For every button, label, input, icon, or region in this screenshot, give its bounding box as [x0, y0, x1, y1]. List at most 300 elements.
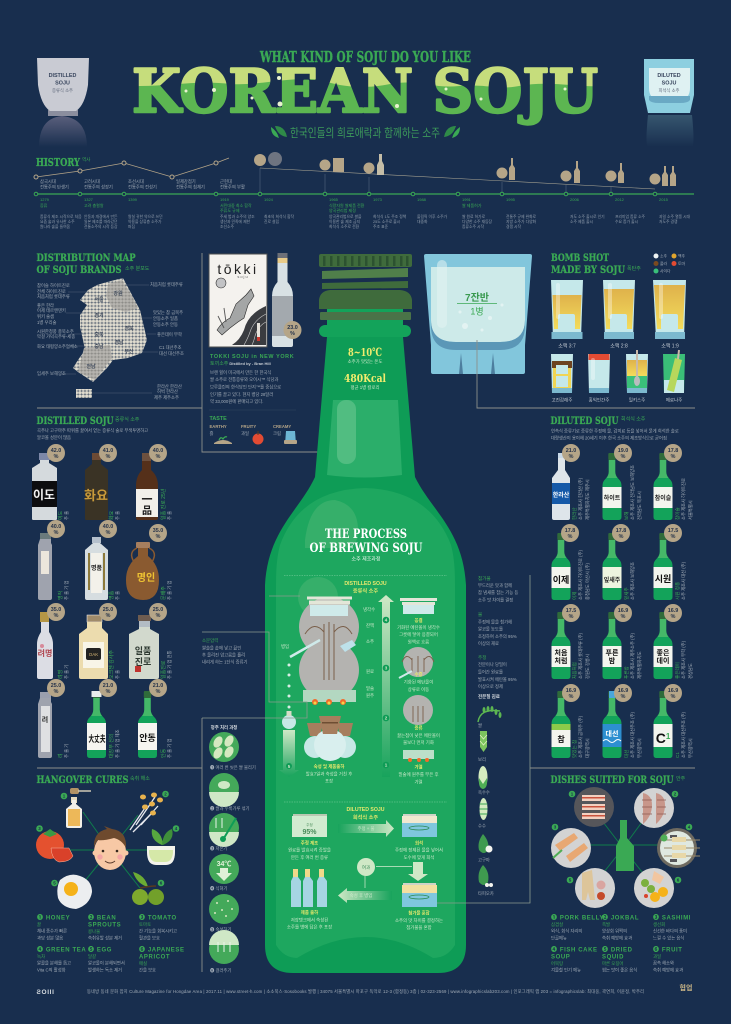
text: brand labels: 안동소주 안동	[153, 321, 178, 328]
icon: fried egg	[57, 875, 92, 909]
bottle: 대장부: %	[106, 689, 111, 695]
bottle: 매실: 추 출 기	[63, 665, 70, 679]
bottle: 오크젠: 25.0	[103, 607, 113, 613]
text: dishes list: 단골메뉴	[551, 934, 567, 942]
tank: spirit	[288, 814, 331, 861]
bottle: 시원: 17.5	[668, 528, 678, 534]
heading: process of brewing soju	[284, 527, 447, 576]
text: timeline entries: 2015	[659, 197, 669, 202]
bottle: 참이슬: 참이슬	[674, 507, 681, 520]
bottle: 처음처럼: 소주 제조사 롯데주류 (주)	[577, 632, 584, 679]
text: dishes list: 씹는 맛이 좋은 음식	[602, 966, 637, 974]
text: dishes list: ❷ JOKBAL	[602, 914, 639, 922]
text: dishes list: ❹ FISH CAKE	[551, 946, 598, 954]
text: timeline entries: 증류	[40, 202, 48, 208]
arrow: up steps: 2	[385, 716, 388, 721]
bottle: 참이슬: 소주 제조사 하이트진로	[680, 478, 687, 520]
number markers: 5	[53, 881, 56, 886]
text: dishes list: ❶ PORK BELLY	[551, 914, 604, 922]
text: hangover cure list: APRICOT	[139, 954, 170, 960]
tokki label card: soju	[237, 274, 249, 279]
tokki bottle	[272, 253, 293, 347]
step 4: cool: ❹ 식혀기	[210, 885, 227, 892]
text: dishes list: SQUID	[602, 954, 624, 960]
map: South Korea dot map: 부산	[124, 348, 134, 355]
bottle: 시원: 시원 청풍	[674, 582, 680, 600]
bottle: 미담: 25.0	[153, 607, 163, 613]
bottle: 처음처럼	[552, 604, 590, 679]
heading: hangover cures: HANGOVER CURES	[36, 774, 128, 786]
text: hangover cure list: ❸ TOMATO	[139, 914, 177, 922]
text: temperature and calories: 480Kcal	[344, 372, 386, 385]
text: dishes list: 생선회	[653, 921, 665, 928]
panel: rice wine processing	[209, 724, 256, 974]
heading: distribution map	[36, 252, 150, 276]
text: hangover cure list: Vita C의 활성화	[37, 966, 66, 974]
bottle: C1	[654, 684, 694, 758]
text: timeline entries: 지방 소주가 다양화	[506, 219, 537, 224]
diagram: distilled soju process: DISTILLED SOJU	[344, 581, 387, 587]
icon: three bottles: 저장탱크에서 숙성된	[291, 916, 328, 924]
bottle: 맛있는 참 green: 16.9	[566, 688, 576, 694]
bottle: C1: %	[671, 694, 676, 700]
heading: bomb shot: BOMB SHOT	[551, 252, 609, 264]
text: timeline entries: 희석식 소주로 전환	[329, 224, 360, 229]
icon: tomato	[36, 829, 73, 862]
bottle: 푸른밤: 제주특별자치도	[636, 651, 643, 679]
text: aging caption: 포장	[325, 778, 333, 784]
icon: apple	[252, 431, 264, 444]
diagram: diluted soju process: 희석식 소주	[353, 813, 378, 821]
bottle: 안동소주	[85, 520, 121, 600]
heading: process of brewing soju: THE PROCESS	[325, 527, 407, 542]
step: condensation: 원액로 흐름	[408, 638, 429, 646]
panel: tokki soju	[202, 253, 318, 452]
heading: distilled soju: DISTILLED SOJU	[36, 415, 114, 427]
number markers: 6	[677, 878, 680, 883]
bottle: 일품진로: %	[156, 454, 161, 460]
icon: diluted soju cup: SOJU	[662, 80, 676, 86]
text: hangover cure list: 발생하는 독소 제거	[88, 966, 122, 974]
bottle cap	[319, 254, 412, 337]
bottle: 오크젠: 오크젠 감사주	[108, 650, 115, 679]
panel: bomb shot	[551, 252, 686, 404]
text: spirit: 들어간 원료를	[478, 668, 503, 676]
dish: dried squid	[575, 868, 615, 908]
text: temperature and calories: 평균 1병 칼로리	[350, 384, 380, 391]
panel: dishes suited for soju	[530, 768, 700, 974]
text: additives: 첨가물	[478, 575, 491, 582]
text: aging caption: 숙성 및 제품출하	[314, 763, 344, 770]
glass: cider soju	[626, 350, 648, 404]
arrow: aging and bottling: 숙성 후 병입	[350, 892, 372, 899]
icon: rice	[478, 706, 502, 728]
step: heating: 밑술에 원주를 부은 후	[398, 771, 439, 778]
bottle: C1: C1	[675, 752, 680, 758]
chart: early period tan line: 조선시대	[128, 178, 144, 185]
heading: bomb shot: MADE BY SOJU	[551, 264, 625, 276]
neck highlight panel	[327, 400, 402, 478]
bottle: 좋은데이: 좋은데이	[674, 662, 681, 679]
text: timeline entries: 왕실 귀한 약으로 쓰던	[128, 214, 163, 219]
text: timeline entries: 최초의 희석식 합작	[264, 214, 295, 219]
bottle: 푸른밤: 16.9	[618, 608, 628, 614]
bottle: 푸른밤: 밤	[609, 656, 616, 665]
still apparatus: 소주	[366, 639, 374, 645]
bottle: 문배 jug	[126, 524, 173, 600]
bottle: 참이슬: 17.8	[668, 448, 678, 454]
legend: 사이다	[660, 268, 671, 274]
text: water: 알코올 농도를	[478, 626, 503, 632]
glass: beer 3:7: 소맥 3:7	[558, 342, 576, 350]
bottle: 나의	[138, 679, 173, 758]
tank: dilution: 주정에 정제된 물을 넣어서	[395, 846, 443, 854]
bottle: 려	[38, 679, 70, 758]
bottle: 좋은데이 1: %	[621, 454, 626, 460]
text: additives: 잡 냄새를 잡는 기능 등	[478, 589, 518, 596]
bottle: 미담: 진로	[135, 657, 151, 667]
text: hangover cure list: 간을 보호	[139, 966, 156, 972]
tasting notes: FRUITY	[241, 424, 256, 429]
text: dishes list: 과일	[653, 953, 661, 960]
icon: sorghum: 수수	[478, 824, 486, 830]
text: soju distillation note: 후 올려진 압고름을 흘려	[202, 652, 245, 658]
step: condensation: 기화된 에탄올이 냉각수	[397, 624, 440, 631]
bottle: 이도: %	[54, 454, 59, 460]
bottle: 이도: 이도	[57, 510, 64, 520]
bottle: 좋은데이: %	[671, 614, 676, 620]
text: water	[478, 612, 517, 647]
bottle: 시원: 소주 제조사 대선 (주)	[680, 561, 687, 600]
chart: early period tan line: 근현대	[220, 178, 232, 185]
heading: distilled soju: 증류식 소주	[115, 416, 140, 423]
text: hangover cure list: 꿀	[37, 922, 41, 927]
text: water: 조정하여 소주의 95%	[478, 633, 517, 640]
bottle: 좋은데이: 좋은	[657, 649, 670, 657]
text: hangover cure list: 간 기능을 회복시키고	[139, 928, 177, 934]
diagram: diluted soju process	[287, 807, 443, 931]
text: timeline entries: 1991	[462, 197, 472, 202]
text: soju distillation note: 내리게 하는 1단식 증류기	[202, 658, 248, 666]
map: South Korea dot map: 강원	[113, 290, 123, 297]
text: brand labels: 대선 대선주조	[159, 350, 184, 357]
bottle: 려: %	[54, 689, 59, 695]
text: brand labels: 화요 태평양소주업체소	[37, 343, 78, 350]
step: vapor: 상류로 이동	[408, 686, 429, 693]
bottle: 푸른밤: 푸른	[606, 649, 619, 657]
footer text: 동네방 동네 문화 잡지 Culture Magazine for Hongdae Area | 2017.11 | www.street-h.com | 소소북스·Sosobooks 발행 | 34075 서울특별시 마포구 독막로 12-3 (합정동) 3층 | 02-323-2569 | www.infographicslab203.com | 인포그래픽 랩 203 = infographicslab: 최대웅, 곽연희, 이윤정, 박주리	[87, 988, 644, 995]
still apparatus: 원주	[366, 692, 374, 699]
bottle: 매실: 려명	[38, 648, 52, 658]
icon: honey jar	[66, 788, 91, 828]
text: timeline entries: 1279	[40, 197, 50, 202]
text: hangover cure list: SPROUTS	[88, 922, 121, 928]
bottle: 시원	[654, 524, 687, 600]
dish: sashimi	[551, 828, 591, 868]
bottle: 맛있는 참: %	[569, 454, 574, 460]
bottle: 이도	[32, 444, 70, 520]
dish: fruit	[634, 868, 674, 908]
bottle: 잎새주: 이제	[553, 574, 569, 585]
tank: additives: 첨가물 혼합	[408, 910, 430, 916]
text: timeline entries: 과일 소주 열풍 시대	[659, 214, 691, 219]
icon: japanese apricot	[132, 872, 164, 905]
text: dishes list: 숙취 예방에 효과	[653, 966, 683, 974]
tokki label card	[209, 254, 267, 347]
bottle: 시원: 시원	[655, 573, 671, 584]
text: timeline entries: 25도 소주로 출시	[373, 219, 400, 224]
bottle: 좋은데이: 소주 제조사 무학 (주)	[680, 640, 687, 679]
logo: street-h: ƧOIII	[36, 989, 54, 996]
map: South Korea dot map	[73, 278, 147, 398]
bottle: 시원: %	[671, 534, 676, 540]
text: brand labels: C1 대선주조	[159, 344, 182, 351]
text: brand labels: 허벅 한라산	[157, 388, 178, 395]
text: soju distillation note	[202, 637, 248, 666]
text: aging caption	[306, 763, 352, 784]
diagram: distilled soju process	[279, 581, 440, 786]
text: timeline entries: 진로 설립	[264, 219, 279, 224]
text: hangover cure list: 매실	[139, 960, 147, 967]
heading: distilled soju: 곡주나 고구마주 따위를 끓여서 얻는 증류식 술로 무색투명하고	[37, 427, 148, 434]
text: timeline entries: 전통주 규제 완화로	[506, 214, 537, 219]
text: timeline entries: 1399	[128, 197, 138, 202]
icon: large shot glass	[424, 254, 532, 374]
heading: distribution map: DISTRIBUTION MAP	[36, 252, 136, 264]
tasting notes: 크림	[273, 430, 281, 436]
bottle: 명작: 추 출 기 업	[63, 581, 70, 600]
chart: early period tan line	[34, 158, 245, 190]
bottle: 안동소주: 추 출	[114, 591, 121, 600]
step: vapor: 수증	[414, 671, 423, 678]
bottle: 맛있는 참 green: 참	[557, 734, 565, 744]
bottle: 푸른밤	[602, 604, 643, 679]
heading: starch ingredients: 전분질 원료	[478, 693, 500, 699]
bottle: 화요: 화요	[109, 510, 115, 520]
bottle: 화요	[84, 444, 121, 520]
text: dishes list: ❺ DRIED	[602, 946, 633, 954]
heading: bomb shot	[551, 252, 641, 276]
text: dishes list: ❻ FRUIT	[653, 946, 683, 954]
icon: three bottles: 제품 출하	[301, 909, 318, 916]
glass: beer 2:8	[603, 280, 635, 350]
panel: diluted soju	[550, 415, 694, 758]
text: timeline entries: 대중화	[417, 219, 428, 224]
bottle: 맛있는 참 green	[552, 684, 591, 758]
step: vapor	[399, 647, 434, 693]
text: timeline entries: 소주 제품 출시	[570, 219, 593, 224]
map: South Korea dot map: 경북	[124, 325, 134, 332]
text: tokki description: 약 33,000원에 판매되고 있다.	[210, 398, 264, 405]
heading: diluted soju	[550, 415, 679, 442]
text: timeline entries: 2006	[570, 197, 580, 202]
text: tokki description: 토끼소주Distilled by - Bran Hill	[210, 360, 271, 367]
diagram: diluted soju process: DILUTED SOJU	[346, 807, 385, 813]
bottle: 푸른밤: 푸른밤	[623, 666, 630, 679]
icon: green tea bowl	[147, 829, 175, 865]
step: heating: 가열	[414, 764, 423, 770]
text: dishes list: SOUP	[551, 954, 570, 960]
text: hangover cure list: 과당 성분 많음	[37, 934, 63, 942]
tank: dilution: 도수에 맞게 희석	[404, 854, 434, 861]
tasting notes	[209, 410, 297, 444]
bottle: 잎새주: 이제	[571, 592, 578, 600]
bottle: 좋은데이 1: 하이트	[604, 494, 621, 502]
number markers: 2	[674, 792, 677, 797]
text: tokki description: 브랜 힐이 미국에서 만든 한 한국식	[210, 369, 271, 376]
tank: additives: 소주의 맛 차이를 결정하는	[395, 917, 443, 924]
still apparatus	[281, 596, 375, 729]
text: tokki description: TOKKI SOJU in NEW YORK	[210, 354, 294, 360]
step: heating	[398, 750, 439, 786]
bottle: 잎새주: %	[568, 534, 573, 540]
text: hangover cure list: 알코올이 분해되면서	[88, 960, 125, 966]
bottle: 나의: 추 출 기 업	[166, 739, 173, 758]
icon: diluted soju cup: DILUTED	[657, 73, 681, 79]
arrow: up steps	[378, 595, 394, 777]
icon: diluted soju cup: 희석식 소주	[659, 87, 680, 94]
dish: jokbal	[634, 788, 674, 828]
tasting notes: 과일	[241, 430, 249, 437]
arrow: aging and bottling	[338, 888, 392, 903]
still apparatus: 잔액	[366, 622, 374, 629]
text: hangover cure list	[37, 914, 185, 974]
bottle: 맛있는 참: 제주특별자치도 제주시	[584, 479, 591, 520]
bottle: 참이슬: 서울특별시	[687, 500, 694, 520]
icon: diluted soju cup	[644, 59, 694, 147]
text: spirit: 전분이나 당밀이	[478, 661, 507, 668]
step 2: steam: ❷ 쌀과 누룩가루 섞기	[210, 805, 250, 812]
text: timeline entries: 쌀 원료 허가로	[462, 214, 486, 219]
text: timeline entries: 양곡관리법 제정	[329, 207, 356, 213]
chart: main green timeline	[34, 192, 694, 196]
bottle: 화요: 화요	[84, 488, 108, 503]
heading: history korean: 역사	[82, 156, 91, 163]
text: aging caption: 발효7일과 숙성을 거친 후	[306, 770, 352, 778]
heading: hangover cures: 숙취 해소	[130, 775, 150, 782]
steam blob	[298, 577, 338, 617]
tasting notes: 흙	[210, 430, 214, 437]
text: timeline entries: 쌀 제품허가	[462, 202, 482, 208]
text: additives: 소주 맛 차이를 결정	[478, 596, 513, 604]
text: hangover cure list: ❷ BEAN	[88, 914, 116, 922]
map: South Korea dot map: 경기	[94, 312, 104, 319]
text: dishes list	[551, 914, 691, 974]
dish: fish cake soup	[657, 828, 700, 868]
step 1: wash rice	[209, 732, 256, 771]
text: brand labels: 한라산 한라산	[157, 383, 182, 390]
text: timeline entries: 다양한 소주 재등장	[462, 219, 493, 224]
bottle: 대선: 대선	[606, 729, 618, 738]
badge: 23.0%	[284, 321, 302, 339]
bottle: 잎새주: 17.8	[565, 528, 575, 534]
number markers: 6	[160, 881, 163, 886]
text: brand labels: 좋은 한라	[37, 302, 54, 309]
connector lines	[70, 812, 150, 888]
bottle: 오크젠: 추 출	[114, 670, 121, 679]
icon: large shot glass: 7잔반	[465, 291, 489, 304]
text: hangover cure list: 혈관을 보호	[139, 934, 160, 942]
bottle: 문배 jug: %	[156, 534, 161, 540]
text: spirit: 이상으로 정제	[478, 683, 503, 690]
text: brand labels: 참이슬 하이트진로	[37, 282, 70, 289]
bottle: 려: 추 출 기	[63, 744, 70, 758]
icon: large shot glass: 1병	[470, 306, 484, 316]
bottle: 미담: 일품	[135, 645, 151, 656]
bottle: 문배 jug: 문배주	[160, 586, 167, 600]
bottle: 대장부	[87, 679, 121, 758]
bottle: 맛있는 참: 한라산	[571, 507, 578, 520]
icon: barley	[478, 731, 487, 763]
text: brand labels: 전체 하이트진로	[37, 288, 66, 295]
arrow: water mix: 주정 + 물	[357, 825, 375, 832]
bottle: 잎새주: 소주 제조사 하이트진로 (주)	[577, 550, 584, 600]
bottle: C1: C	[656, 730, 666, 746]
bottle: 매실: 려명	[57, 670, 64, 679]
dish: pork belly	[574, 787, 614, 827]
text: hangover cure list: 토마토	[139, 921, 151, 928]
bottle: 참이슬 2: 잎새주	[604, 576, 621, 584]
bottle: 푸른밤: %	[621, 614, 626, 620]
map: South Korea dot map: 전남	[86, 363, 96, 370]
text: brand labels: 시원한청풍 충북소주	[37, 328, 74, 335]
text: timeline entries: 주류도 규제	[220, 207, 240, 213]
text: spirit: 주정	[478, 654, 486, 661]
step 5: ferment: ❺ 숙성하기	[210, 926, 231, 933]
arrow: up steps: 4	[385, 618, 388, 623]
text: dishes list: 양상회 워쩍의	[602, 928, 627, 934]
text: dishes list: 삼겹살	[551, 921, 563, 927]
text: temperature and calories: 소주가 맛있는 온도	[348, 358, 382, 365]
map: South Korea dot map: 서울	[94, 296, 104, 303]
map: South Korea dot map: 충남	[94, 343, 104, 350]
bottle: 좋은데이	[654, 604, 693, 679]
glass: popsicle soju	[663, 350, 685, 404]
legend: 맥주	[678, 254, 685, 258]
text: timeline entries: 전통소주의 시작 등장	[84, 224, 118, 229]
step 4: cool	[209, 854, 239, 892]
badge: 23.0%: %	[290, 331, 295, 337]
text: timeline entries: 프리미엄 증류 소주	[615, 214, 646, 219]
bottle: 이도: 추 출	[63, 511, 70, 520]
text: brand labels: 임세주 보해양조	[37, 370, 66, 377]
heading: diluted soju: 희석식 소주	[621, 416, 646, 422]
bottle: 좋은데이 1: 전라남도 목포시	[636, 491, 643, 520]
bottle: 맛있는 참: 한라산	[553, 491, 570, 499]
bottle: 일품진로	[136, 444, 173, 520]
text: temperature and calories	[344, 345, 386, 391]
text: timeline entries: 조선소주	[220, 224, 234, 229]
step 5: ferment	[209, 894, 239, 933]
bottle: 미담: %	[156, 613, 161, 619]
icon: three bottles: 소주를 병에 담은 후 포장	[287, 924, 332, 930]
chart: early period tan line: 전통주의 탄생기	[40, 184, 69, 190]
text: timeline entries: 1988	[417, 197, 427, 202]
bottle: 대장부: 대장부 신의	[108, 734, 115, 758]
bottle: 좋은데이: 16.9	[668, 608, 678, 614]
bottle: 오크젠	[79, 603, 121, 679]
bottle: 참이슬 2: 17.8	[616, 528, 626, 534]
bottle: 처음처럼: 처음	[555, 648, 568, 657]
icon: bean sprouts	[130, 792, 163, 832]
text: timeline entries: 2012	[615, 197, 625, 202]
text: hangover cure list: 콩나물	[88, 928, 100, 935]
connector: shot glass to right panel	[477, 340, 695, 408]
bottle: main soju bottle	[265, 254, 466, 973]
text: dishes list: 외식, 회식 자리의	[551, 928, 582, 934]
text: timeline entries: 양곡관리법으로 쌀을	[329, 214, 362, 219]
icon: soil sprout	[214, 437, 232, 444]
